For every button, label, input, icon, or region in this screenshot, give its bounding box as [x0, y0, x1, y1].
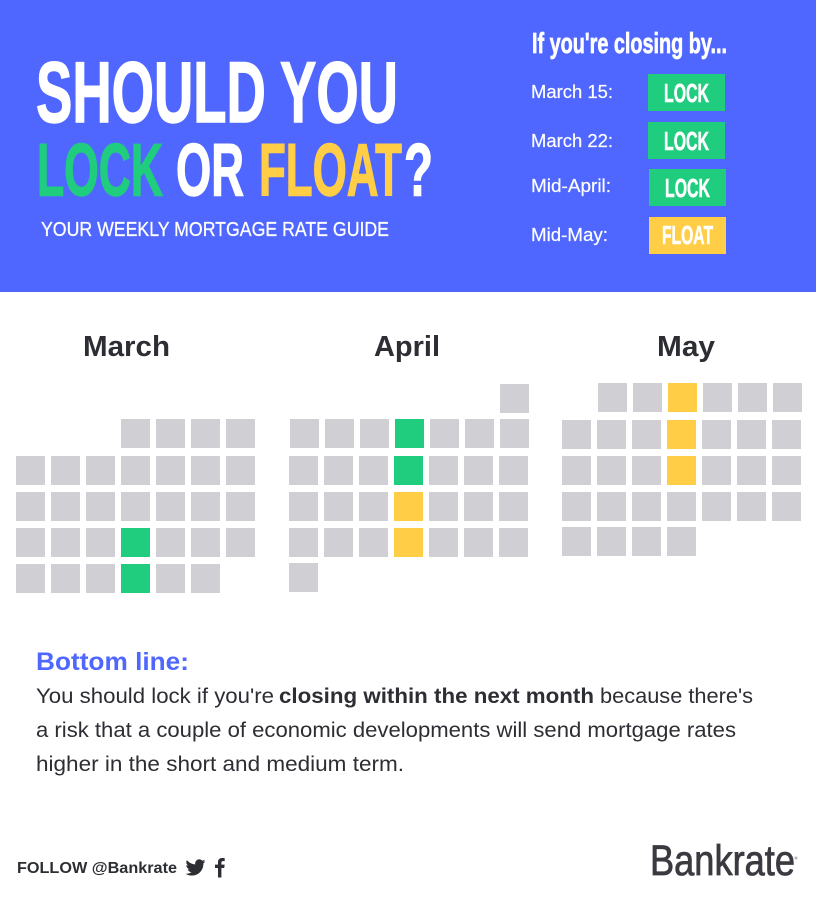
panel: blue header — [0, 0, 816, 292]
text block: bottom line body: You should lock if you're — [36, 684, 274, 708]
text block: bottom line body: closing within the next month — [279, 684, 594, 708]
row: Mid-May float — [531, 217, 726, 254]
title — [36, 45, 433, 212]
text block: bottom line body: because there's — [600, 684, 753, 708]
title: SHOULD YOU — [36, 45, 398, 141]
text block: bottom line body: higher in the short and medium term. — [36, 752, 404, 776]
icon: facebook f — [215, 858, 225, 878]
heading: March: March — [83, 331, 170, 363]
row: Mid-April lock: LOCK — [665, 173, 710, 203]
title: OR — [176, 128, 244, 212]
title: ? — [404, 128, 433, 212]
calendar: March — [16, 419, 255, 593]
heading: May: May — [657, 331, 715, 363]
heading: if you're closing by: If you're closing by... — [532, 28, 727, 60]
row: March 15 lock — [531, 74, 725, 111]
row: March 22 lock — [531, 122, 725, 159]
row: Mid-April lock — [531, 169, 726, 206]
row: March 22 lock: March 22: — [531, 130, 613, 151]
row: Mid-May float: FLOAT — [662, 220, 713, 250]
title: LOCK — [37, 128, 163, 212]
icon: twitter bird — [186, 859, 205, 876]
title: FLOAT — [259, 128, 402, 212]
text block: bottom line body — [36, 684, 753, 776]
row: Mid-May float: Mid-May: — [531, 224, 608, 245]
calendar: May — [562, 383, 802, 556]
row: March 15 lock: March 15: — [531, 81, 613, 102]
row: March 15 lock: LOCK — [664, 78, 709, 108]
subtitle: YOUR WEEKLY MORTGAGE RATE GUIDE — [41, 219, 389, 241]
heading: April: April — [374, 331, 440, 363]
footer: follow text: FOLLOW @Bankrate — [17, 860, 177, 877]
calendar: April — [289, 384, 529, 592]
text block: bottom line body: a risk that a couple of economic developments will send mortgage rates — [36, 718, 736, 742]
row: Mid-April lock: Mid-April: — [531, 175, 611, 196]
heading: bottom line: Bottom line: — [36, 648, 189, 676]
row: March 22 lock: LOCK — [664, 126, 709, 156]
